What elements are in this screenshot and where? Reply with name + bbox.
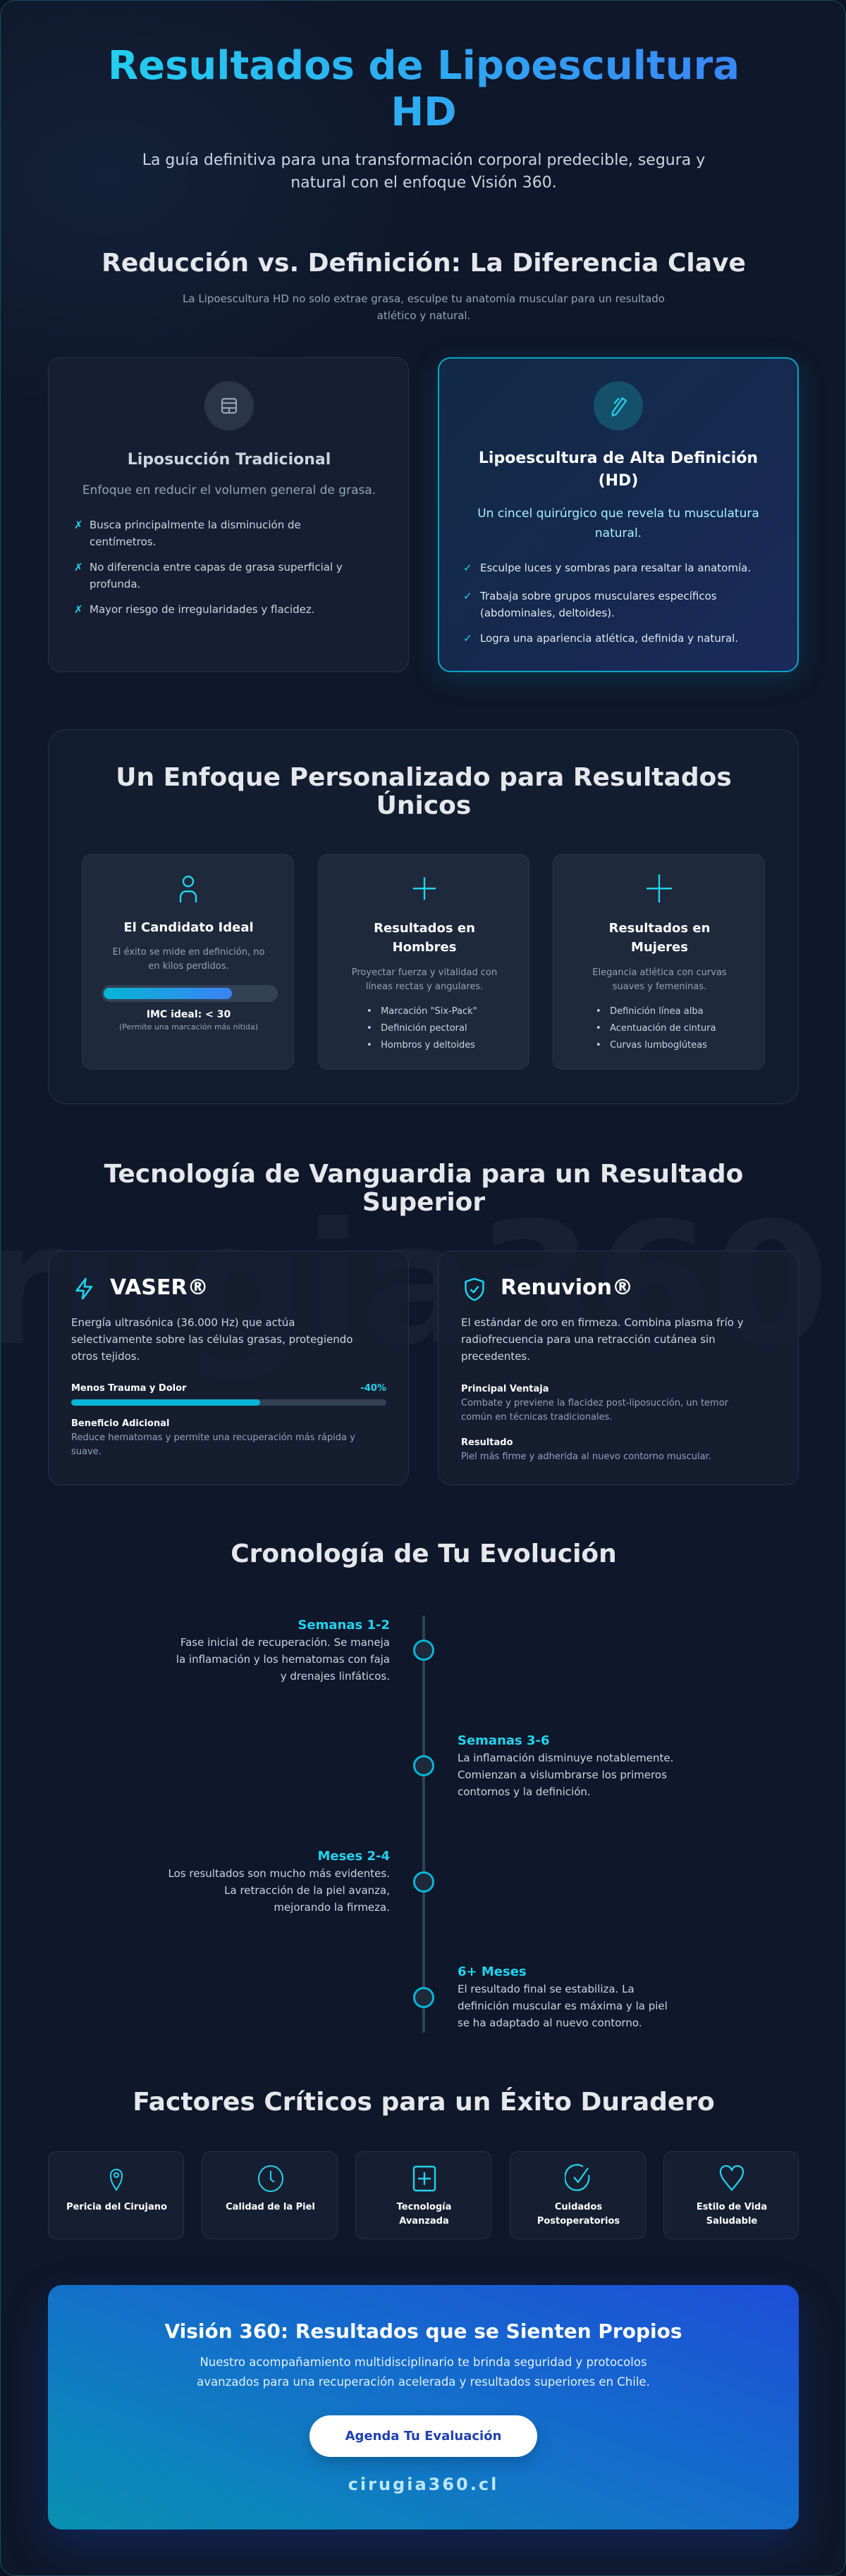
step: meses 2-4: Meses 2-4 <box>317 1849 390 1864</box>
step: semanas 1-2 <box>176 1618 390 1683</box>
timeline <box>168 1616 673 2033</box>
list: drawbacks: No diferencia entre capas de grasa superficial y profunda. <box>90 561 343 590</box>
step: 6+ meses: 6+ Meses <box>458 1964 527 1979</box>
icon: pin <box>110 2169 123 2191</box>
title: Resultados en <box>609 921 710 936</box>
factor: tecnología <box>355 2151 491 2239</box>
factor: tecnología: Avanzada <box>399 2216 449 2227</box>
list: drawbacks: Mayor riesgo de irregularidades y flacidez. <box>90 603 314 616</box>
desc: El éxito se mide en definición, no en kilos perdidos. <box>113 947 264 972</box>
text: beneficio adicional: Beneficio Adicional <box>71 1418 169 1429</box>
heading: factores: Factores Críticos para un Éxito Duradero <box>133 2088 715 2117</box>
panel: lipoescultura HD <box>438 357 799 672</box>
icon: table <box>204 381 254 431</box>
icon: plus <box>413 877 436 900</box>
IMC note: (Permite una marcación más nítida) <box>119 1022 258 1032</box>
step: 6+ meses <box>458 1964 668 2029</box>
icon: heart <box>719 2165 744 2191</box>
cta title: Visión 360: Resultados que se Sienten Propios <box>164 2320 682 2343</box>
card: hombres <box>318 854 529 1070</box>
factor: pericia <box>48 2151 184 2239</box>
heading: Reducción vs. Definición: Reducción vs. Definición: La Diferencia Clave <box>102 249 746 278</box>
marker 3 <box>413 1871 434 1893</box>
text: section intro: La Lipoescultura HD no solo extrae grasa, esculpe tu anatomía muscular para un resultado atlético y natural. <box>183 292 665 322</box>
list: benefits: ✓ <box>463 632 472 645</box>
icon: shield <box>465 1278 484 1301</box>
card subtitle: Un cincel quirúrgico que revela tu musculatura natural. <box>477 507 759 540</box>
list: benefits: Trabaja sobre grupos musculares específicos (abdominales, deltoides). <box>480 590 717 619</box>
icon: pen <box>594 381 643 431</box>
title: Resultados en <box>374 921 475 936</box>
step: semanas 3-6: Semanas 3-6 <box>458 1733 550 1748</box>
list: • Definición pectoral <box>367 1023 467 1034</box>
step: meses 2-4 <box>168 1849 390 1914</box>
panel: liposucción tradicional <box>48 357 409 672</box>
list: • Hombros y deltoides <box>367 1040 475 1051</box>
list: drawbacks <box>74 519 343 616</box>
title: Mujeres <box>631 940 688 955</box>
list: benefits: ✓ <box>463 562 472 574</box>
marker 4 <box>413 1987 434 2008</box>
heading: Un Enfoque Personalizado para Resultados Únicos <box>116 763 732 820</box>
factor: cuidados: Cuidados <box>555 2202 602 2212</box>
text: resultado <box>461 1437 711 1462</box>
button: Agenda Tu Evaluación <box>345 2429 501 2444</box>
text: principal ventaja: Principal Ventaja <box>461 1384 549 1394</box>
IMC label: IMC ideal: < 30 <box>147 1009 231 1020</box>
subtitle: natural con el enfoque Visión 360. <box>290 174 557 192</box>
step: semanas 1-2: Fase inicial de recuperación. Se maneja <box>180 1636 390 1649</box>
card: mujeres <box>553 854 765 1070</box>
panel: enfoque personalizado <box>48 729 799 1104</box>
step: semanas 3-6: contornos y la definición. <box>458 1785 591 1798</box>
list: drawbacks: ✗ <box>74 561 83 574</box>
icon: lightning <box>75 1278 93 1299</box>
card subtitle: Enfoque en reducir el volumen general de grasa. <box>82 483 376 497</box>
list: • Definición línea alba <box>596 1006 704 1017</box>
marker 2 <box>413 1755 434 1776</box>
step: semanas 1-2: la inflamación y los hematomas con faja <box>176 1653 390 1666</box>
step: 6+ meses: definición muscular es máxima y la piel <box>458 2000 668 2012</box>
title: Renuvion® <box>501 1275 633 1300</box>
marker 1 <box>413 1640 434 1661</box>
title: Resultados de Lipoescultura HD <box>108 43 740 135</box>
desc: Proyectar fuerza y vitalidad con líneas rectas y angulares. <box>352 967 497 992</box>
step: semanas 1-2: y drenajes linfáticos. <box>281 1670 390 1683</box>
list <box>367 1006 477 1051</box>
icon: clock <box>258 2165 283 2192</box>
subtitle <box>142 151 705 192</box>
icon: check circle <box>565 2164 589 2191</box>
factor: calidad piel: Calidad de la Piel <box>226 2202 315 2212</box>
text: resultado: Piel más firme y adherida al nuevo contorno muscular. <box>461 1451 711 1462</box>
list: drawbacks: ✗ <box>74 603 83 616</box>
factor: estilo de vida <box>663 2151 799 2239</box>
panel: Renuvion <box>438 1251 799 1485</box>
icon: plus <box>646 874 672 903</box>
bar: IMC <box>102 985 278 1002</box>
step: meses 2-4: Los resultados son mucho más evidentes. <box>168 1867 390 1880</box>
step: semanas 3-6: Comienzan a vislumbrarse los primeros <box>458 1769 667 1781</box>
icon: user <box>179 875 197 903</box>
button <box>309 2415 537 2457</box>
icon: plus square <box>413 2166 436 2191</box>
title: VASER® <box>110 1275 209 1300</box>
list: benefits: Esculpe luces y sombras para resaltar la anatomía. <box>480 562 751 574</box>
bar: menos trauma <box>71 1383 386 1406</box>
step: semanas 3-6 <box>458 1733 673 1798</box>
subtitle: La guía definitiva para una transformación corporal predecible, segura y <box>142 151 705 169</box>
list <box>596 1006 716 1051</box>
text: principal ventaja <box>461 1384 728 1423</box>
list: benefits <box>463 562 751 645</box>
desc: El estándar de oro en firmeza. Combina plasma frío y radiofrecuencia para una retracción cutánea sin precedentes. <box>461 1316 744 1363</box>
list: drawbacks: ✗ <box>74 519 83 531</box>
text: beneficio adicional <box>71 1418 355 1457</box>
factor: estilo de vida: Estilo de Vida <box>697 2202 767 2212</box>
step: meses 2-4: La retracción de la piel avanza, <box>224 1884 390 1897</box>
desc: Energía ultrasónica (36.000 Hz) que actúa selectivamente sobre las células grasas, protegiendo otros tejidos. <box>71 1316 352 1363</box>
card title: Lipoescultura de Alta Definición (HD) <box>479 450 758 490</box>
card title: Liposucción Tradicional <box>128 451 331 469</box>
list: • Curvas lumboglúteas <box>596 1040 707 1051</box>
factor: pericia: Pericia del Cirujano <box>66 2202 167 2212</box>
factor: cuidados: Postoperatorios <box>537 2216 620 2227</box>
list: benefits: Logra una apariencia atlética, definida y natural. <box>480 632 738 645</box>
step: 6+ meses: se ha adaptado al nuevo contorno. <box>458 2017 642 2029</box>
heading: cronología: Cronología de Tu Evolución <box>231 1540 617 1568</box>
heading: tecnología: Tecnología de Vanguardia para un Resultado Superior <box>104 1160 743 1217</box>
text: principal ventaja: Combate y previene la flacidez post-liposucción, un temor común en técnicas tradicionales. <box>461 1398 728 1423</box>
card: candidato ideal <box>82 854 294 1070</box>
bar: menos trauma: -40% <box>360 1383 386 1394</box>
list: drawbacks: Busca principalmente la disminución de centímetros. <box>90 519 301 548</box>
website: cirugia360.cl <box>348 2475 498 2494</box>
factor: estilo de vida: Saludable <box>706 2216 757 2227</box>
step: semanas 3-6: La inflamación disminuye notablemente. <box>458 1752 673 1764</box>
title <box>374 921 475 955</box>
title: Hombres <box>393 940 456 955</box>
step: meses 2-4: mejorando la firmeza. <box>274 1901 390 1914</box>
list: benefits: ✓ <box>463 590 472 602</box>
factor: calidad piel <box>202 2151 338 2239</box>
desc: Elegancia atlética con curvas suaves y femeninas. <box>592 967 727 992</box>
factor: cuidados <box>510 2151 646 2239</box>
list: • Acentuación de cintura <box>596 1023 716 1034</box>
title <box>609 921 710 955</box>
bar: menos trauma: Menos Trauma y Dolor <box>71 1383 186 1394</box>
factor: tecnología: Tecnología <box>397 2202 451 2212</box>
text: beneficio adicional: Reduce hematomas y permite una recuperación más rápida y suave. <box>71 1432 355 1457</box>
step: 6+ meses: El resultado final se estabiliza. La <box>458 1983 634 1995</box>
step: semanas 1-2: Semanas 1-2 <box>298 1618 390 1633</box>
list: • Marcación "Six-Pack" <box>367 1006 477 1017</box>
cta text: Nuestro acompañamiento multidisciplinario te brinda seguridad y protocolos avanzados para una recuperación acelerada y resultados superiores en Chile. <box>197 2355 650 2389</box>
title: El Candidato Ideal <box>123 920 254 935</box>
callout: Visión 360 CTA <box>48 2285 799 2529</box>
panel: VASER <box>48 1251 409 1485</box>
text: resultado: Resultado <box>461 1437 513 1448</box>
